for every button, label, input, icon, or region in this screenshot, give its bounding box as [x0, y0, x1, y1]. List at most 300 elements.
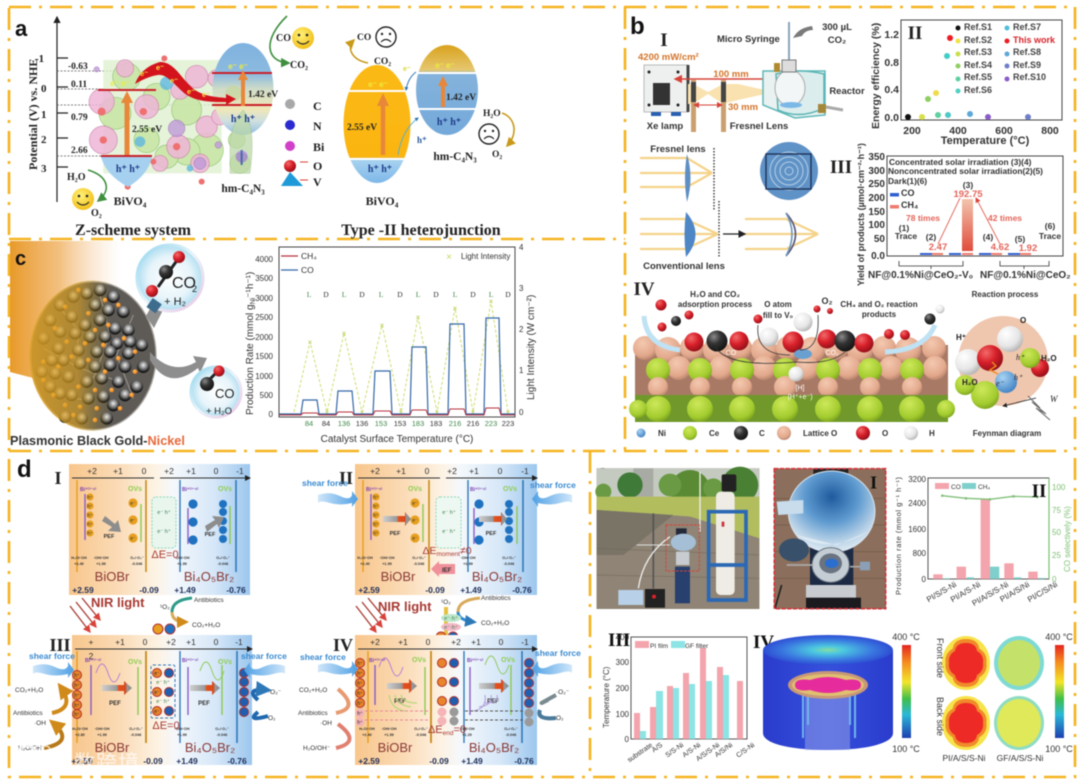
sub-panel III temperature bar chart: S/S-Ni — [665, 742, 686, 759]
sub-panel d-IV: +2 — [451, 637, 461, 647]
sub-panel d-II: h⁺ — [373, 504, 379, 510]
sub-panel d-II: e⁻ — [412, 518, 418, 524]
sub-panel III temperature bar chart: 0 — [625, 735, 630, 744]
atom legend — [281, 99, 325, 189]
sub-panel d-III: PEF — [109, 701, 121, 707]
sub-panel d-II: ΔE — [422, 545, 436, 557]
production rate chart: 84 — [305, 419, 313, 428]
Type-II hm-C4N3 ellipse: h⁺ h⁺ — [437, 117, 461, 128]
sub-panel II energy efficiency scatter: Ref.S2 — [964, 35, 992, 45]
sub-panel d-III: + — [89, 637, 94, 647]
d-III shear force and side reactions: O₂ — [268, 715, 276, 722]
sub-panel IV surface reaction mechanism: CH₄ and O₂ reaction — [840, 300, 918, 309]
potential axis: 1 — [41, 109, 46, 121]
sub-panel III yield bar chart: NF@0.1%Ni@CeO₂ — [980, 270, 1071, 281]
sub-panel IV surface reaction mechanism: Reaction process — [972, 290, 1039, 299]
sub-panel III temperature bar chart: A/S — [651, 742, 664, 754]
panel letter d: d — [17, 456, 32, 483]
sub-panel d-III: e⁻ — [154, 671, 160, 677]
panel c: plasmonic black gold-nickel — [10, 241, 537, 448]
sub-panel III temperature bar chart: Temperature (°C) — [602, 666, 611, 728]
production rate chart: L — [453, 290, 458, 299]
sub-panel I optical setup: Reactor — [829, 86, 865, 97]
sub-panel II energy efficiency scatter: 0.8 — [884, 57, 899, 69]
sub-panel d-II: moment — [436, 551, 460, 558]
Type-II H2O to O2 frown: H₂O — [483, 109, 501, 119]
sub-panel d-I: BiOBr — [95, 569, 130, 584]
sub-panel d-IV: 0 — [426, 637, 431, 647]
atom legend row — [636, 426, 1041, 440]
sub-panel I optical setup — [638, 22, 865, 132]
production rate chart: D — [359, 290, 365, 299]
Type-II BiVO4 ellipse: h⁺ h⁺ — [368, 164, 392, 175]
sub-panel d-I: Bi₄O₅Br₂ — [184, 569, 234, 584]
sub-panel IV reactor temperature simulation — [753, 632, 893, 750]
temperature heat maps: GF/A/S/S-Ni — [997, 753, 1043, 763]
production rate chart: 136 — [356, 419, 368, 428]
sub-panel d-III: Bi₄O₅Br₂ — [185, 740, 235, 755]
sub-panel d-III: h⁺ — [74, 712, 80, 718]
sub-panel d-I: PEF — [205, 532, 216, 538]
sub-panel III yield bar chart: 100 — [868, 220, 885, 231]
production rate chart: 2000 — [255, 333, 274, 342]
sub-panel II energy efficiency scatter: 400 — [949, 125, 967, 137]
sub-panel II production rate and selectivity chart: 800 — [913, 549, 927, 558]
sub-panel III yield bar chart: 1.92 — [1019, 243, 1037, 254]
sub-panel d-III: +1.99 — [97, 733, 107, 737]
Type-II BiVO4 ellipse — [344, 65, 410, 208]
production rate chart: 500 — [260, 391, 274, 400]
sub-panel II production rate and selectivity chart: II — [1032, 481, 1046, 502]
sub-panel d-I: e⁻ — [130, 501, 136, 507]
production rate chart: × — [489, 297, 494, 306]
d-III shear force and side reactions: shear force — [241, 651, 287, 661]
d-III shear force and side reactions — [13, 651, 287, 752]
sub-panel III yield bar chart: 192.75 — [953, 189, 983, 200]
sub-panel d-II: IEF — [442, 568, 452, 574]
sub-panel d-II: +1.99 — [463, 562, 473, 566]
electron transfer arrow: e⁻ — [156, 63, 164, 72]
Type-II hm-C4N3 ellipse: 1.42 eV — [446, 93, 476, 103]
sub-panel d-II: PEF — [390, 531, 401, 537]
sub-panel II production rate and selectivity chart: 2400 — [908, 499, 927, 508]
sub-panel I optical setup: I — [660, 30, 668, 51]
d-II and d-IV shear force and side reactions — [298, 478, 581, 752]
electron transfer arrow: e⁻ — [202, 90, 210, 99]
NIR light and antibiotics, right column: NIR light — [378, 599, 432, 614]
Type-II BiVO4 ellipse: e⁻ e⁻ — [368, 80, 388, 89]
Type-II hm-C4N3 ellipse: e⁻ — [403, 66, 411, 73]
sub-panel III yield bar chart: Trace — [895, 231, 917, 241]
sub-panel d-IV: -0.09 — [429, 756, 449, 766]
sub-panel II production rate and selectivity chart: 0 — [1052, 575, 1057, 584]
production rate chart: 223 — [485, 419, 497, 428]
sub-panel d-I: -0.046 — [218, 562, 228, 566]
production rate chart: 4 — [519, 243, 524, 252]
sub-panel d-I: +2.59 — [72, 585, 94, 595]
sub-panel II energy efficiency scatter: Ref.S7 — [1013, 22, 1041, 32]
sub-panel IV surface reaction mechanism: O atom — [764, 300, 792, 309]
sub-panel d-IV: h⁺ — [357, 681, 363, 687]
sub-panel d-II: Bi₄O₅Br₂ — [472, 569, 522, 584]
sub-panel d-III: +2.80 — [75, 733, 85, 737]
watermark: 大数跨境 — [52, 752, 140, 775]
potential axis: 3 — [41, 163, 47, 175]
atom legend row: C — [759, 429, 765, 438]
NIR light and antibiotics, right column: e⁻·h⁺ — [444, 624, 458, 631]
sub-panel III yield bar chart: Trace — [1039, 231, 1061, 241]
potential axis: 0 — [41, 83, 47, 95]
sub-panel d-IV: -0.046 — [506, 733, 516, 737]
hm-C4N3 band ellipse, Z-scheme: hm-C₄N₃ — [221, 183, 265, 195]
sub-panel III yield bar chart: 300 — [868, 166, 885, 177]
light beam and lenses — [675, 69, 786, 132]
production rate chart: × — [416, 313, 421, 322]
sub-panel d-II: e⁻ h⁺ — [442, 528, 456, 535]
sub-panel d-II: h⁺ — [373, 531, 379, 537]
sub-panel III yield bar chart: NF@0.1%Ni@CeO₂-V₀ — [868, 270, 973, 281]
sub-panel II energy efficiency scatter: 1.2 — [884, 29, 899, 41]
sub-panel II energy efficiency scatter: 200 — [903, 125, 921, 137]
sub-panel d-II: BiOBr — [381, 569, 416, 584]
sub-panel d-IV: ·OH/·OH — [382, 727, 397, 731]
adsorbed molecules: (H⁺+e⁻) — [787, 394, 813, 401]
sub-panel d-I: -0.09 — [139, 585, 159, 595]
sub-panel II production rate and selectivity chart: 25 — [1052, 551, 1061, 560]
sub-panel II production rate and selectivity chart: PI/A/S/S-Ni — [970, 580, 1010, 608]
production rate chart: 216 — [467, 419, 479, 428]
sub-panel d-II: 0 — [425, 466, 430, 476]
sub-panel d-II: +1.49 — [460, 585, 482, 595]
atom legend: C — [313, 99, 322, 113]
sub-panel III yield bar chart: 2.47 — [929, 242, 947, 253]
adsorbed molecules: [H] — [796, 385, 805, 392]
sub-panel IV reactor temperature simulation: IV — [753, 632, 774, 653]
sub-panel I optical setup: Micro Syringe — [717, 34, 780, 45]
sub-panel d-IV: Bi₄O₅Br₂ — [469, 740, 519, 755]
production rate chart: 2500 — [255, 313, 274, 322]
light beam and lenses: 30 mm — [728, 102, 758, 113]
sub-panel d-IV: +1.29 — [462, 733, 472, 737]
sub-panel II energy efficiency scatter: 600 — [995, 125, 1013, 137]
atom legend: N — [313, 119, 322, 133]
sub-panel d-III: O₂/·O₂⁻ — [215, 727, 229, 731]
panel letter c: c — [15, 248, 26, 270]
sub-panel d-IV: -0.046 — [416, 733, 426, 737]
hm-C4N3 band ellipse, Z-scheme — [212, 43, 278, 195]
sub-panel d-IV: h⁺ — [357, 671, 363, 677]
sub-panel d-III: ·OH/·OH — [95, 727, 110, 731]
sub-panel d-III: h⁺ — [74, 693, 80, 699]
sub-panel d-IV: BiOBr — [378, 740, 413, 755]
sub-panel II energy efficiency scatter: Ref.S10 — [1013, 72, 1046, 82]
sub-panel III temperature bar chart: PI film — [650, 643, 668, 650]
sub-panel d-II: +2.40 — [360, 562, 370, 566]
d-III shear force and side reactions: CO₂+H₂O — [15, 687, 43, 694]
CO2 plus H2 bubble: 2 — [192, 284, 197, 294]
production rate chart: 0 — [269, 410, 274, 419]
Type-II CO2 to CO frown: CO₂ — [374, 57, 391, 67]
sub-panel d-IV: +1.49 — [461, 756, 483, 766]
sub-panel II production rate and selectivity chart: 75 — [1052, 506, 1061, 515]
arrow to CO bubble — [150, 352, 207, 378]
sub-panel III yield bar chart: 78 times — [906, 213, 940, 223]
sub-panel III yield bar chart: (4) — [983, 232, 993, 242]
sub-panel d-III: e⁻ h⁺ — [156, 679, 170, 686]
sub-panel III yield bar chart: Dark(1)(6) — [888, 176, 927, 186]
sub-panel II energy efficiency scatter: II — [908, 23, 922, 44]
sub-panel d-II: -0.046 — [504, 562, 514, 566]
sub-panel d-I: O₂/·O₂⁻ — [130, 556, 144, 560]
sub-panel d-III: -0.046 — [131, 733, 141, 737]
production rate chart: × — [360, 408, 365, 417]
production rate chart: D — [397, 290, 403, 299]
sub-panel d-II: +2 — [447, 466, 457, 476]
sub-panel d-III: e⁻ — [154, 709, 160, 715]
production rate chart: × — [342, 329, 347, 338]
sub-panel d-III: PEF — [198, 701, 210, 707]
d-II and d-IV shear force and side reactions: ·O₂⁻ — [556, 689, 570, 696]
hm-C4N3 band ellipse, Z-scheme: e⁻ e⁻ — [228, 62, 248, 71]
sub-panel III temperature bar chart: A/S-Ni — [682, 742, 703, 759]
potential axis: 0.11 — [71, 80, 87, 90]
sub-panel III yield bar chart: 42 times — [988, 213, 1022, 223]
sub-panel d-I: 0 — [214, 466, 219, 476]
sub-panel d-II: -0.09 — [425, 585, 445, 595]
sub-panel I optical setup: Fresnel Lens — [730, 121, 788, 132]
sub-panel III yield bar chart: 350 — [868, 152, 885, 163]
production rate chart: × — [471, 408, 476, 417]
sub-panel d-IV: +2.40 — [362, 733, 372, 737]
sub-panel III yield bar chart: III — [830, 157, 852, 178]
sub-panel d-IV: +1.99 — [384, 733, 394, 737]
production rate chart: CH₄ — [301, 251, 317, 261]
potential axis: 2 — [41, 134, 47, 146]
Feynman diagram circle: H₂O — [962, 378, 978, 387]
production rate chart: 84 — [322, 419, 330, 428]
sub-panel III yield bar chart: Nonconcentrated solar irradiation(2)(5) — [888, 166, 1043, 176]
sub-panel d-II: e⁻ — [412, 536, 418, 542]
sub-panel d-III: 2 — [89, 651, 94, 661]
CO2 plus H2 bubble — [137, 245, 203, 328]
sub-panel III yield bar chart: 0.0 — [871, 251, 885, 262]
production rate chart: L — [416, 290, 421, 299]
sub-panel d-III: +2 — [166, 637, 176, 647]
sub-panel d-III: +1.99 — [177, 733, 187, 737]
sub-panel d-II: +2 — [370, 466, 380, 476]
production rate chart: × — [435, 408, 440, 417]
Fresnel vs conventional lens: Conventional lens — [643, 261, 725, 272]
sub-panel d-I: ΔE=0 — [151, 549, 179, 561]
panel a: Z-scheme vs Type-II heterojunction — [15, 16, 514, 239]
potential axis: 0.79 — [71, 113, 88, 123]
sub-panel d-I: -0.046 — [132, 562, 142, 566]
charge density isosurface blobs — [89, 55, 250, 190]
sub-panel d-IV: h⁺ — [357, 720, 363, 726]
sub-panel d-IV: =0 — [454, 724, 466, 736]
production rate chart: D — [505, 290, 511, 299]
production rate chart: 1000 — [255, 372, 274, 381]
production rate chart: Light Intensity (W cm⁻²) — [526, 295, 537, 400]
production rate chart: L — [307, 290, 312, 299]
NIR light and antibiotics, left column: e⁻·h⁺ — [157, 634, 171, 641]
sub-panel II energy efficiency scatter: Ref.S4 — [964, 60, 992, 70]
d-II and d-IV shear force and side reactions: H₂O/OH⁻ — [303, 745, 331, 752]
sub-panel III temperature bar chart: 400 — [616, 633, 630, 642]
sub-panel II energy efficiency scatter: Temperature (°C) — [941, 135, 1030, 147]
production rate chart: 183 — [430, 419, 442, 428]
CO2 to CO smiley — [270, 16, 314, 71]
sub-panel d-II: 0 — [498, 466, 503, 476]
potential axis: 2.66 — [71, 146, 88, 156]
sub-panel II production rate and selectivity chart: 1600 — [908, 525, 927, 534]
electron transfer arrow: e⁻ — [140, 69, 148, 78]
adsorbed molecules: CO — [726, 350, 737, 357]
Type-II BiVO4 ellipse: 2.55 eV — [347, 123, 377, 133]
adsorbed molecules: CO₂ — [825, 350, 839, 357]
production rate chart: × — [446, 252, 452, 263]
sub-panel d-IV: end — [443, 730, 454, 737]
d-II and d-IV shear force and side reactions: O₂ — [556, 715, 564, 722]
production rate chart: 3500 — [255, 274, 274, 283]
watermark — [16, 746, 140, 775]
CO2 to CO smiley: CO — [276, 33, 291, 44]
sub-panel d-II: +2.59 — [358, 585, 380, 595]
NIR light and antibiotics, right column: e⁻·h⁺ — [444, 615, 458, 622]
sub-panel I optical setup: 4200 mW/cm² — [638, 52, 699, 63]
d-II and d-IV shear force and side reactions: shear force — [530, 480, 576, 490]
sub-panel d-I — [54, 464, 250, 595]
NIR light and antibiotics, right column — [356, 595, 511, 662]
NIR light and antibiotics, left column: Antibiotics — [194, 597, 224, 604]
production rate chart: ⁻¹h⁻¹) — [245, 272, 256, 298]
CO2 to CO smiley: CO₂ — [290, 60, 308, 71]
production rate chart: 136 — [338, 419, 350, 428]
sub-panel d-III: -1 — [235, 637, 243, 647]
sub-panel d-II: II — [339, 468, 353, 488]
sub-panel d-I: I — [54, 468, 62, 488]
sub-panel II energy efficiency scatter: Ref.S5 — [964, 72, 992, 82]
sub-panel d-III: H₂O/·OH — [72, 727, 88, 731]
sub-panel IV surface reaction mechanism — [629, 279, 1059, 440]
sub-panel III yield bar chart: 50 — [874, 234, 885, 245]
sub-panel d-IV: O₂/·O₂⁻ — [414, 727, 428, 731]
production rate chart: × — [325, 408, 330, 417]
sub-panel III temperature bar chart: 200 — [616, 684, 630, 693]
production rate chart: Ni — [250, 297, 257, 304]
temperature heat maps: Back side — [935, 697, 945, 736]
production rate chart: 216 — [449, 419, 461, 428]
d-III shear force and side reactions: Antibiotics — [13, 710, 43, 717]
incident light glow — [10, 241, 120, 385]
Type-II hm-C4N3 ellipse: e⁻ e⁻ — [435, 61, 455, 70]
CO plus H2O bubble: CO — [215, 386, 234, 401]
sub-panel d-IV: Bi⁺⁽³⁻ˣ⁾ — [369, 658, 386, 664]
BiVO4 bands, Z-scheme: h⁺ h⁺ — [116, 164, 140, 175]
sub-panel d-II — [339, 464, 537, 595]
atom legend row: O — [882, 429, 888, 438]
sub-panel III yield bar chart: CO — [901, 188, 914, 198]
sub-panel d-I: e⁻ h⁺ — [157, 528, 171, 535]
Feynman diagram circle — [955, 316, 1059, 420]
sub-panel II energy efficiency scatter: Ref.S1 — [964, 22, 992, 32]
sub-panel d-IV: +2.59 — [358, 756, 380, 766]
sub-panel II production rate and selectivity chart — [894, 475, 1072, 608]
d-II and d-IV shear force and side reactions: shear force — [535, 648, 581, 658]
production rate chart: 1 — [519, 366, 524, 375]
production rate chart — [245, 243, 537, 445]
sub-panel III temperature bar chart: III — [608, 630, 630, 651]
sub-panel d-IV: h⁺ — [357, 701, 363, 707]
sub-panel III temperature bar chart: A/S/Ni — [714, 742, 735, 759]
sub-panel II production rate and selectivity chart: 0 — [922, 575, 927, 584]
sub-panel d-II: O₂/·O₂⁻ — [502, 556, 516, 560]
sub-panel d-II: ·OH/·OH — [380, 556, 395, 560]
sub-panel II energy efficiency scatter: 800 — [1041, 125, 1059, 137]
sub-panel IV surface reaction mechanism: IV — [633, 279, 655, 300]
sub-panel d-III: Bi⁺⁽³⁻ˣ⁾ — [182, 658, 199, 664]
production rate chart: 4000 — [255, 255, 274, 264]
color scale bars and labels: 400 °C — [1045, 632, 1073, 642]
NIR light and antibiotics, left column — [70, 595, 224, 659]
sub-panel d-II: h⁺ — [373, 495, 379, 501]
outdoor reactor photo — [595, 467, 759, 609]
sub-panel d-IV — [333, 635, 537, 766]
sub-panel d-III: e⁻ h⁺ — [156, 698, 170, 705]
sub-panel d-I: h⁺ — [87, 495, 93, 501]
sub-panel II energy efficiency scatter: 0.4 — [884, 84, 899, 96]
panel letter a: a — [15, 16, 28, 41]
Type-II H2O to O2 frown — [479, 109, 514, 160]
Type-II BiVO4 ellipse: BiVO₄ — [366, 194, 399, 208]
H2O to O2 smiley — [67, 170, 106, 219]
Type-II heterojunction title: Type -II heterojunction — [341, 222, 501, 239]
d-II and d-IV shear force and side reactions: CO₂+H₂O — [299, 687, 327, 694]
sub-panel d-III: O₂/·O₂⁻ — [129, 727, 143, 731]
sub-panel d-IV: +1 — [471, 637, 481, 647]
sub-panel II production rate and selectivity chart: Production rate (mmol g⁻¹ h⁻¹) — [894, 476, 903, 595]
sub-panel III yield bar chart — [830, 143, 1071, 286]
BiVO4 bands, Z-scheme: BiVO₄ — [114, 194, 147, 208]
sub-panel d-III: h⁺ — [74, 673, 80, 679]
sub-panel III temperature bar chart: substrate — [627, 742, 654, 764]
sub-panel d-I: H₂O/·OH — [71, 556, 87, 560]
color scale bars and labels: 100 °C — [1045, 744, 1073, 754]
sub-panel d-III: 0 — [143, 637, 148, 647]
d-II and d-IV shear force and side reactions: shear force — [300, 652, 346, 662]
d-II and d-IV shear force and side reactions: Antibiotics — [298, 710, 328, 717]
hm-C4N3 band ellipse, Z-scheme: 1.42 eV — [248, 90, 278, 100]
sub-panel d-II: H₂O/·OH — [357, 556, 373, 560]
sub-panel d-II: +1 — [396, 466, 406, 476]
sub-panel III temperature bar chart: A/S/S-Ni — [695, 742, 722, 763]
sub-panel d-IV: 0 — [499, 637, 504, 647]
sub-panel III yield bar chart: 200 — [868, 193, 885, 204]
sub-panel d-I: +2 — [87, 466, 97, 476]
d-III shear force and side reactions: ·OH — [34, 720, 46, 727]
sub-panel d-I: ·OH/·OH — [94, 556, 109, 560]
d-III shear force and side reactions: shear force — [29, 651, 75, 661]
Feynman diagram circle: e⁻ — [996, 379, 1005, 388]
sub-panel II energy efficiency scatter: Ref.S9 — [1013, 60, 1041, 70]
electron transfer arrow: e⁻ — [187, 87, 195, 96]
sub-panel d-I: +2 — [164, 466, 174, 476]
sub-panel d-III: -0.046 — [217, 733, 227, 737]
sub-panel d-II: h⁺ — [373, 513, 379, 519]
Fresnel vs conventional lens: Fresnel lens — [650, 144, 706, 155]
d-III shear force and side reactions: ·O₂⁻ — [268, 689, 282, 696]
CO plus H2O bubble: + H₂O — [206, 406, 232, 417]
